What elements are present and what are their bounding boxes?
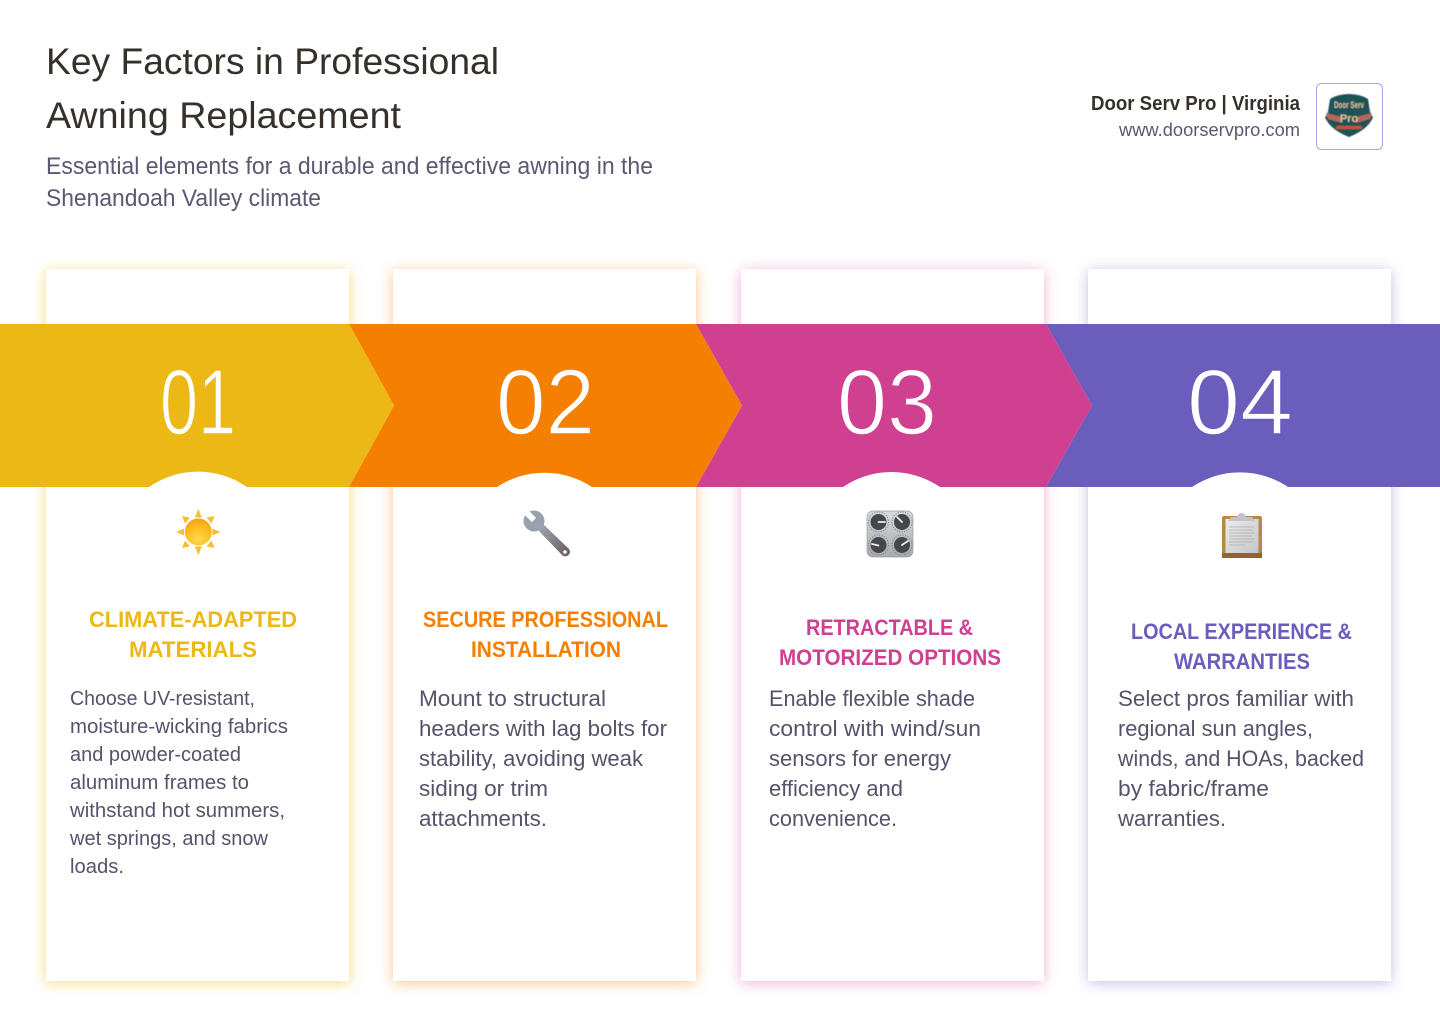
title: Awning Replacement xyxy=(46,95,402,136)
icon: clipboard xyxy=(1222,513,1262,558)
heading: retractable and motorized options: RETRACTABLE & xyxy=(806,615,973,640)
heading: retractable and motorized options: MOTORIZED OPTIONS xyxy=(779,645,1001,670)
chevron 01: 01 xyxy=(160,350,236,454)
heading: secure professional installation: INSTALLATION xyxy=(471,637,621,662)
chevron 01 xyxy=(0,324,394,487)
body text: secure professional installation: siding or trim xyxy=(419,776,548,801)
body text: climate-adapted materials xyxy=(69,687,288,878)
heading: secure professional installation xyxy=(423,607,668,662)
brand name and website: Door Serv Pro | Virginia xyxy=(1091,93,1301,115)
brand name and website xyxy=(1091,93,1301,140)
subtitle xyxy=(46,153,653,212)
title: Key Factors in Professional xyxy=(46,41,499,82)
chevron 04: 04 xyxy=(1187,350,1293,454)
heading: local experience and warranties: LOCAL EXPERIENCE & xyxy=(1131,619,1352,644)
panel: retractable and motorized options xyxy=(741,269,1044,981)
body text: retractable and motorized options: efficiency and xyxy=(769,776,903,801)
body text: climate-adapted materials: and powder-coated xyxy=(70,743,241,766)
body text: secure professional installation: Mount to structural xyxy=(419,686,606,711)
body text: retractable and motorized options xyxy=(769,686,981,831)
chevron band xyxy=(0,324,1440,487)
icon: wrench xyxy=(522,508,570,556)
body text: secure professional installation: headers with lag bolts for xyxy=(419,716,667,741)
title xyxy=(46,41,499,136)
chevron 03: 03 xyxy=(837,350,937,454)
heading: climate-adapted materials: MATERIALS xyxy=(129,637,257,662)
heading: secure professional installation: SECURE PROFESSIONAL xyxy=(423,607,668,632)
logo badge: Door Serv xyxy=(1334,100,1364,110)
body text: retractable and motorized options: convenience. xyxy=(769,806,897,831)
body text: local experience and warranties: by fabric/frame xyxy=(1118,776,1269,801)
body text: secure professional installation: attachments. xyxy=(419,806,547,831)
body text: retractable and motorized options: Enable flexible shade xyxy=(769,686,975,711)
subtitle: Essential elements for a durable and effective awning in the xyxy=(46,153,653,180)
chevron 02: 02 xyxy=(496,350,595,454)
heading: climate-adapted materials: CLIMATE-ADAPTED xyxy=(89,607,297,632)
body text: local experience and warranties xyxy=(1117,686,1364,831)
body text: local experience and warranties: regional sun angles, xyxy=(1118,716,1313,741)
body text: retractable and motorized options: sensors for energy xyxy=(769,746,951,771)
subtitle: Shenandoah Valley climate xyxy=(46,185,321,212)
chevron 02 xyxy=(349,324,742,487)
chevron 03 xyxy=(696,324,1092,487)
body text: climate-adapted materials: moisture-wicking fabrics xyxy=(70,715,288,738)
panel: secure professional installation xyxy=(393,269,696,981)
icon: control knobs xyxy=(867,511,913,557)
heading: local experience and warranties: WARRANTIES xyxy=(1174,649,1310,674)
logo badge xyxy=(1316,84,1382,150)
logo badge: Pro xyxy=(1340,113,1358,125)
heading: retractable and motorized options xyxy=(779,615,1001,670)
body text: retractable and motorized options: control with wind/sun xyxy=(769,716,981,741)
body text: climate-adapted materials: wet springs, and snow xyxy=(69,827,268,850)
body text: local experience and warranties: winds, and HOAs, backed xyxy=(1117,746,1364,771)
body text: local experience and warranties: warranties. xyxy=(1117,806,1226,831)
body text: climate-adapted materials: aluminum frames to xyxy=(70,771,249,794)
panel: climate-adapted materials xyxy=(46,269,349,981)
chevron 04 xyxy=(1046,324,1440,487)
panel: local experience and warranties xyxy=(1088,269,1391,981)
brand name and website: www.doorservpro.com xyxy=(1118,120,1300,140)
icon: sun xyxy=(176,509,220,555)
body text: secure professional installation xyxy=(419,686,667,831)
heading: local experience and warranties xyxy=(1131,619,1352,674)
body text: climate-adapted materials: loads. xyxy=(70,855,124,878)
body text: local experience and warranties: Select pros familiar with xyxy=(1118,686,1354,711)
heading: climate-adapted materials xyxy=(89,607,297,662)
body text: secure professional installation: stability, avoiding weak xyxy=(419,746,644,771)
body text: climate-adapted materials: Choose UV-resistant, xyxy=(70,687,255,710)
body text: climate-adapted materials: withstand hot summers, xyxy=(69,799,285,822)
